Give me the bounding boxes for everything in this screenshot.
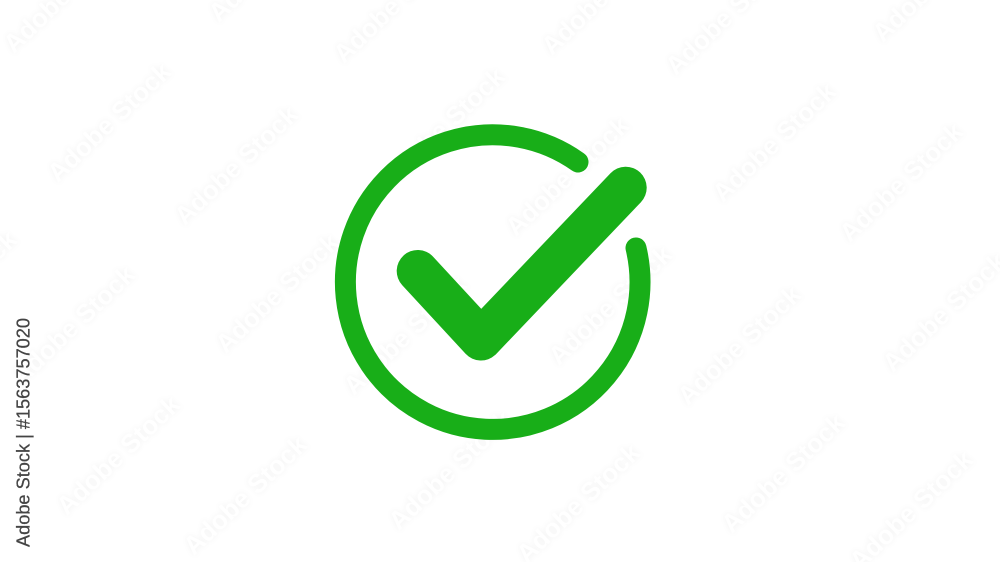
vertical stock id caption: Adobe Stock | #1563757020 [14,318,34,547]
watermark layer: repeated Adobe Stock text: Adobe Stock [706,76,842,208]
watermark layer: repeated Adobe Stock text: Adobe Stock [50,389,186,521]
watermark layer: repeated Adobe Stock text: Adobe Stock [41,56,177,188]
watermark layer: repeated Adobe Stock text: Adobe Stock [337,269,473,401]
icon: green check mark in open circle [345,135,640,429]
watermark layer: repeated Adobe Stock text: Adobe Stock [542,239,678,371]
open circle ring [345,135,640,429]
watermark layer: repeated Adobe Stock text: Adobe Stock [209,227,345,359]
watermark layer: repeated Adobe Stock text: Adobe Stock [168,99,304,231]
watermark layer: repeated Adobe Stock text: Adobe Stock [375,61,511,193]
watermark layer: repeated Adobe Stock text: Adobe Stock [499,110,635,242]
watermark layer: repeated Adobe Stock text: Adobe Stock [833,116,969,248]
watermark layer: repeated Adobe Stock text: Adobe Stock [5,259,141,391]
watermark layer: repeated Adobe Stock text: Adobe Stock [382,404,518,536]
watermark layer: repeated Adobe Stock text: Adobe Stock [177,429,313,561]
watermark layer: repeated Adobe Stock text: Adobe Stock [671,279,807,411]
watermark layer: repeated Adobe Stock text: Adobe Stock [715,407,851,539]
check mark [418,188,626,340]
